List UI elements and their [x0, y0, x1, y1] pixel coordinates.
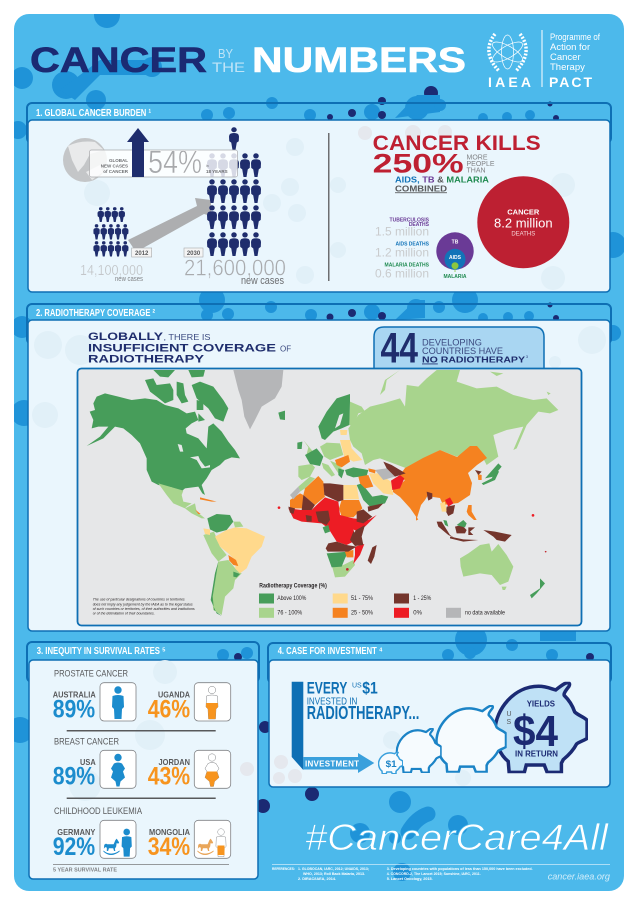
icon: man in blue — [100, 683, 136, 721]
references — [272, 867, 533, 881]
chart: nested disease circles: MALARIA — [443, 274, 467, 280]
map: China and India — [393, 446, 487, 518]
group: prostate cancer: PROSTATE CANCER — [54, 669, 128, 680]
callout: 44 countries: 3 — [526, 355, 528, 359]
icon: largest piggy bank US$4: YIELDS — [527, 699, 555, 709]
legend: 51 - 75% — [351, 596, 374, 602]
legend — [259, 583, 506, 618]
heading: cancer kills: MORE — [466, 154, 488, 162]
icon: small piggy bank $1 — [378, 752, 403, 774]
map: Central Asia — [375, 462, 406, 490]
title — [30, 41, 466, 80]
title: BY — [218, 46, 233, 61]
panel: radiotherapy coverage — [27, 304, 611, 631]
chart: cancer deaths circle: 8.2 million — [494, 216, 553, 230]
stat: 14,100,000 new cases: new cases — [115, 276, 143, 283]
chart: cancer deaths circle: DEATHS — [511, 232, 535, 238]
callout: 44 countries: 44 — [380, 325, 418, 373]
icon: woman partly orange — [194, 750, 231, 788]
group: breast cancer: 43% — [148, 762, 190, 790]
list: other disease deaths: 1.5 million — [375, 225, 429, 239]
people 2030 — [207, 127, 261, 256]
icon: globe — [63, 138, 107, 182]
heading: cancer kills: PEOPLE — [466, 161, 495, 168]
arrow: investment L shape — [292, 682, 374, 773]
title: NUMBERS — [252, 41, 466, 80]
arrow: up — [127, 128, 149, 177]
callout: 54 percent increase: 54% — [148, 144, 202, 180]
map: South East Asia and Oceania — [416, 470, 546, 590]
icon: largest piggy bank US$4: $4 — [513, 707, 558, 756]
heading: insufficient coverage: INSUFFICIENT COVERAGE — [88, 343, 276, 355]
legend: 1 - 25% — [413, 596, 432, 602]
references: 3. Developing countries with populations of less than 150,000 have been excluded. — [387, 867, 533, 871]
group: prostate cancer: 46% — [148, 695, 190, 723]
references: WHO, 2013; Roll Back Malaria, 2013. — [303, 872, 365, 876]
logo divider and PACT text: Therapy — [550, 62, 585, 73]
group: childhood leukemia: CHILDHOOD LEUKEMIA — [54, 806, 143, 817]
chart: cancer deaths circle — [477, 176, 569, 268]
icon: largest piggy bank US$4: S — [506, 719, 512, 726]
legend: 0% — [413, 611, 423, 617]
chart: nested disease circles: AIDS — [449, 255, 462, 261]
heading: cancer kills: 250% — [373, 148, 464, 178]
icon: IAEA logo: IAEA — [488, 74, 531, 90]
callout: 44 countries — [374, 325, 544, 373]
label: 2030: 2030 — [187, 251, 201, 257]
heading: section 2: 2. RADIOTHERAPY COVERAGE ² — [36, 308, 156, 319]
references: 5. Lancet Oncology, 2015. — [387, 877, 433, 881]
text: every US$1 invested: $1 — [362, 678, 378, 697]
text: every US$1 invested — [307, 678, 419, 723]
group: breast cancer: USA — [80, 757, 96, 767]
list: other disease deaths: 0.6 million — [375, 267, 429, 281]
panel: inequity in survival rates — [27, 642, 259, 879]
callout: 54 percent increase: GLOBAL — [109, 158, 128, 163]
group: prostate cancer: AUSTRALIA — [53, 689, 96, 699]
heading: cancer kills: AIDS, TB & MALARIA — [395, 175, 489, 185]
list: other disease deaths: MALARIA DEATHS — [385, 263, 430, 269]
callout: 54 percent increase: of CANCER — [103, 169, 129, 174]
list: other disease deaths: 1.2 million — [375, 246, 429, 260]
legend: 76 - 100% — [277, 611, 303, 617]
icon: largest piggy bank US$4: U — [506, 711, 512, 718]
text: every US$1 invested: INVESTED IN — [307, 696, 357, 707]
heading: insufficient coverage: , THERE IS — [164, 332, 211, 342]
list: other disease deaths — [375, 217, 430, 281]
panel: global cancer burden — [27, 103, 611, 292]
heading: cancer kills — [373, 132, 541, 193]
heading: cancer kills: CANCER KILLS — [373, 132, 541, 155]
title: THE — [212, 59, 245, 75]
list: other disease deaths: DEATHS — [409, 222, 430, 228]
references: 4. CONCORD-2, The Lancet 2015; Sunshine, IARC, 2011. — [387, 872, 481, 876]
title: CANCER — [30, 41, 207, 80]
text: every US$1 invested: US — [352, 683, 362, 690]
logo divider and PACT text: Programme of — [550, 32, 600, 43]
chart: cancer deaths circle: CANCER — [507, 208, 540, 216]
chart: nested disease circles: TB — [452, 240, 459, 246]
references: 1. GLOBOCAN, IARC, 2012; UNAIDS, 2013; — [298, 867, 369, 871]
legend: Radiotherapy Coverage (%) — [259, 583, 327, 590]
caption: 5 year survival rate: 5 YEAR SURVIVAL RATE — [53, 868, 117, 874]
heading: section 1: 1. GLOBAL CANCER BURDEN ¹ — [36, 108, 152, 119]
heading: insufficient coverage: RADIOTHERAPY — [88, 354, 205, 366]
map: Russia and northern Europe — [318, 370, 558, 478]
callout: 44 countries: NO RADIOTHERAPY — [422, 354, 525, 364]
icon: IAEA logo — [488, 34, 531, 90]
label: 2030 — [184, 248, 203, 257]
list: other disease deaths: TUBERCULOSIS — [390, 217, 430, 223]
callout: 54 percent increase — [90, 144, 238, 180]
heading: cancer kills: COMBINED — [395, 183, 447, 193]
stat: 21,600,000 new cases: 21,600,000 — [184, 254, 286, 280]
label: 2012: 2012 — [135, 251, 149, 257]
map disclaimer: of such countries or territories, of their authorities and institutions — [93, 607, 195, 611]
heading: insufficient coverage: OF — [280, 345, 291, 354]
map: North America and Greenland — [87, 370, 285, 495]
icon: medium piggy bank — [397, 728, 441, 773]
group: prostate cancer — [53, 669, 231, 723]
heading: cancer kills: THAN — [466, 168, 486, 174]
icon: child and rocking horse partly orange — [194, 820, 231, 858]
stat: 21,600,000 new cases: new cases — [241, 275, 284, 287]
group: childhood leukemia — [53, 806, 231, 861]
legend: Above 100% — [277, 596, 307, 602]
group: prostate cancer: 89% — [53, 695, 95, 723]
legend: no data available — [465, 611, 506, 617]
logo divider and PACT text: Action for — [550, 42, 590, 53]
icon: largest piggy bank US$4 — [495, 683, 587, 772]
people 2012 — [93, 207, 128, 256]
list: other disease deaths: AIDS DEATHS — [395, 242, 430, 248]
logo divider and PACT text — [542, 30, 600, 90]
legend: 25 - 50% — [351, 611, 374, 617]
group: childhood leukemia: GERMANY — [57, 827, 96, 837]
group: breast cancer — [53, 737, 231, 790]
label: 2012 — [132, 248, 152, 257]
map disclaimer — [93, 598, 195, 616]
icon: child and rocking horse in blue — [100, 820, 136, 858]
arrow: growth 2012 to 2030 — [128, 198, 211, 252]
heading: insufficient coverage — [88, 331, 291, 366]
map disclaimer: does not imply any judgement by the IAEA as to the legal status — [93, 602, 193, 606]
hashtag: #CancerCare4All — [305, 817, 610, 858]
callout: 44 countries: COUNTRIES HAVE — [422, 346, 503, 356]
chart: nested disease circles — [436, 232, 474, 280]
logo divider and PACT text: Cancer — [550, 52, 581, 63]
map disclaimer: The use of particular designations of countries or territories — [93, 598, 185, 602]
text: every US$1 invested: RADIOTHERAPY... — [307, 703, 419, 723]
icon: large piggy bank — [436, 706, 506, 772]
group: childhood leukemia: MONGOLIA — [149, 827, 190, 837]
references: 2. DIRAC/IAEA, 2014. — [298, 877, 336, 881]
references: REFERENCES: — [272, 867, 295, 871]
icon: small piggy bank $1: $1 — [386, 759, 397, 769]
group: childhood leukemia: 92% — [53, 833, 95, 861]
group: breast cancer: JORDAN — [158, 757, 190, 767]
group: breast cancer: BREAST CANCER — [54, 737, 119, 748]
map: Latin America — [158, 483, 545, 616]
heading: section 3: 3. INEQUITY IN SURVIVAL RATES ⁵ — [37, 646, 166, 657]
stat: 14,100,000 new cases: 14,100,000 — [80, 262, 143, 279]
text: every US$1 invested: EVERY — [307, 678, 348, 697]
group: breast cancer: 89% — [53, 762, 95, 790]
map: Africa, Europe and Middle East — [288, 440, 393, 577]
callout: 54 percent increase: 18 YEARS — [206, 169, 228, 174]
map disclaimer: or of the delimitation of their boundaries. — [93, 612, 155, 616]
heading: insufficient coverage: GLOBALLY — [88, 331, 164, 343]
callout: 54 percent increase: in — [206, 164, 209, 168]
heading: section 4: 4. CASE FOR INVESTMENT ⁴ — [278, 646, 383, 657]
group: childhood leukemia: 34% — [148, 833, 190, 861]
callout: 44 countries: DEVELOPING — [422, 338, 482, 348]
icon: man partly orange — [194, 683, 231, 721]
icon: largest piggy bank US$4: IN RETURN — [515, 749, 558, 759]
website: cancer.iaea.org — [548, 871, 611, 882]
group: prostate cancer: UGANDA — [158, 689, 190, 699]
logo divider and PACT text: PACT — [549, 74, 592, 90]
callout: 54 percent increase: NEW CASES — [101, 164, 128, 168]
icon: woman in blue — [100, 750, 136, 788]
panel: case for investment — [268, 643, 611, 787]
arrow: investment L shape: INVESTMENT — [305, 760, 359, 769]
chart: world map of radiotherapy coverage — [78, 368, 582, 626]
